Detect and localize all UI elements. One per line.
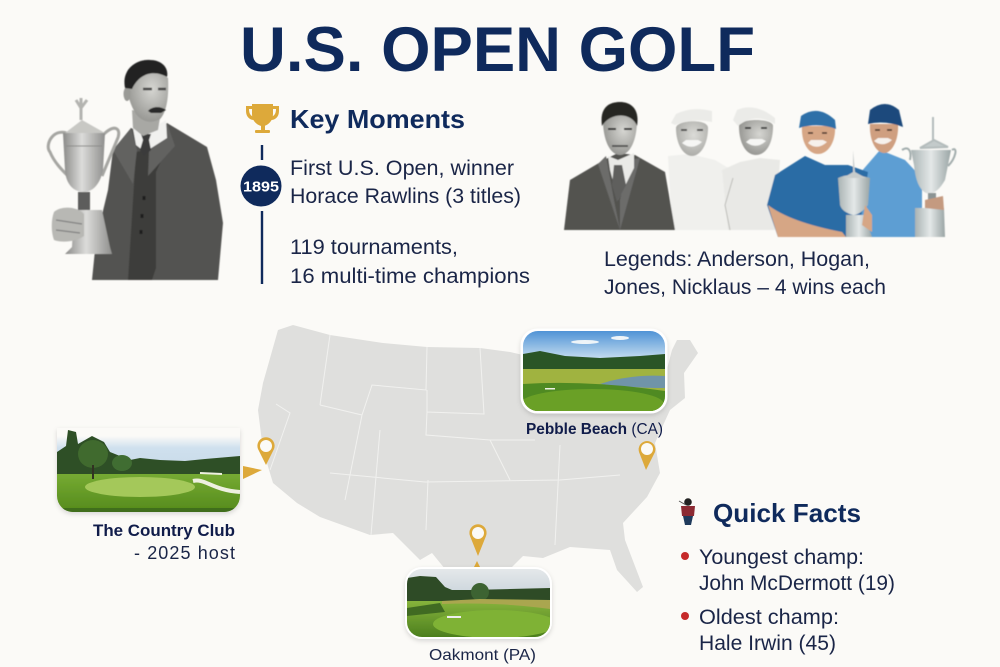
fact: oldest champion: Oldest champ:: [699, 606, 839, 629]
text: first U.S. Open: First U.S. Open, winner: [290, 157, 514, 180]
title: U.S. OPEN GOLF: [240, 15, 755, 85]
icon: golfer: [679, 498, 695, 525]
timeline: [240, 145, 282, 284]
pin: West Coast: [257, 437, 275, 465]
map: United States: [258, 325, 698, 592]
photo: legends group: [564, 102, 955, 237]
photo: Oakmont: [405, 567, 557, 639]
fact: youngest champion: John McDermott (19): [699, 572, 895, 595]
text: first U.S. Open: Horace Rawlins (3 titles): [290, 185, 521, 208]
heading: Quick Facts: Quick Facts: [713, 498, 861, 528]
label: Pebble Beach: Pebble Beach (CA): [526, 421, 663, 438]
text: tournaments: 16 multi-time champions: [290, 265, 530, 288]
text: tournaments: [290, 236, 530, 288]
fact: youngest champion: [681, 546, 895, 595]
arrow: to West Coast pin: [243, 466, 262, 479]
text: legends: [604, 248, 886, 299]
photo: The Country Club: [57, 428, 240, 512]
label: The Country Club: - 2025 host: [134, 543, 235, 563]
timeline: 1895: [243, 178, 279, 196]
photo: Horace Rawlins with trophy: [48, 60, 223, 280]
fact: oldest champion: [681, 606, 839, 655]
icon: gold trophy: [246, 104, 279, 133]
fact: oldest champion: Hale Irwin (45): [699, 632, 836, 655]
text: tournaments: 119 tournaments,: [290, 236, 458, 259]
fact: youngest champion: Youngest champ:: [699, 546, 864, 569]
label: The Country Club: The Country Club: [93, 521, 235, 540]
pin: East Coast: [639, 441, 655, 470]
label: The Country Club: [93, 521, 235, 563]
text: first U.S. Open: [290, 157, 521, 208]
photo: Pebble Beach: [520, 328, 668, 419]
text: legends: Jones, Nicklaus – 4 wins each: [604, 276, 886, 299]
pin: South: [469, 524, 487, 567]
text: legends: Legends: Anderson, Hogan,: [604, 248, 870, 271]
label: Oakmont: Oakmont (PA): [429, 647, 536, 664]
heading: Key Moments: Key Moments: [290, 104, 465, 134]
